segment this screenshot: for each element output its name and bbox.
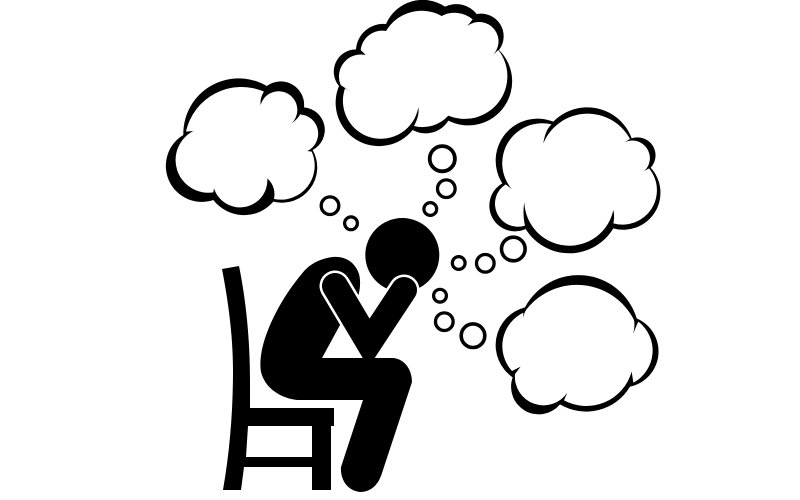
thought bubbles: to top cloud xyxy=(424,146,455,215)
cloud: right xyxy=(489,107,660,253)
cloud: top xyxy=(334,0,512,146)
person arm xyxy=(335,286,404,343)
cloud: lower right xyxy=(496,275,659,414)
cloud: left xyxy=(166,78,325,215)
thought bubbles: to left cloud xyxy=(321,197,357,230)
thought bubbles: to right cloud xyxy=(452,237,525,272)
thought bubbles: to lower right cloud xyxy=(434,289,485,348)
person arm outline xyxy=(335,286,404,343)
person body xyxy=(260,257,412,492)
chair xyxy=(222,266,334,490)
person head xyxy=(365,218,439,292)
